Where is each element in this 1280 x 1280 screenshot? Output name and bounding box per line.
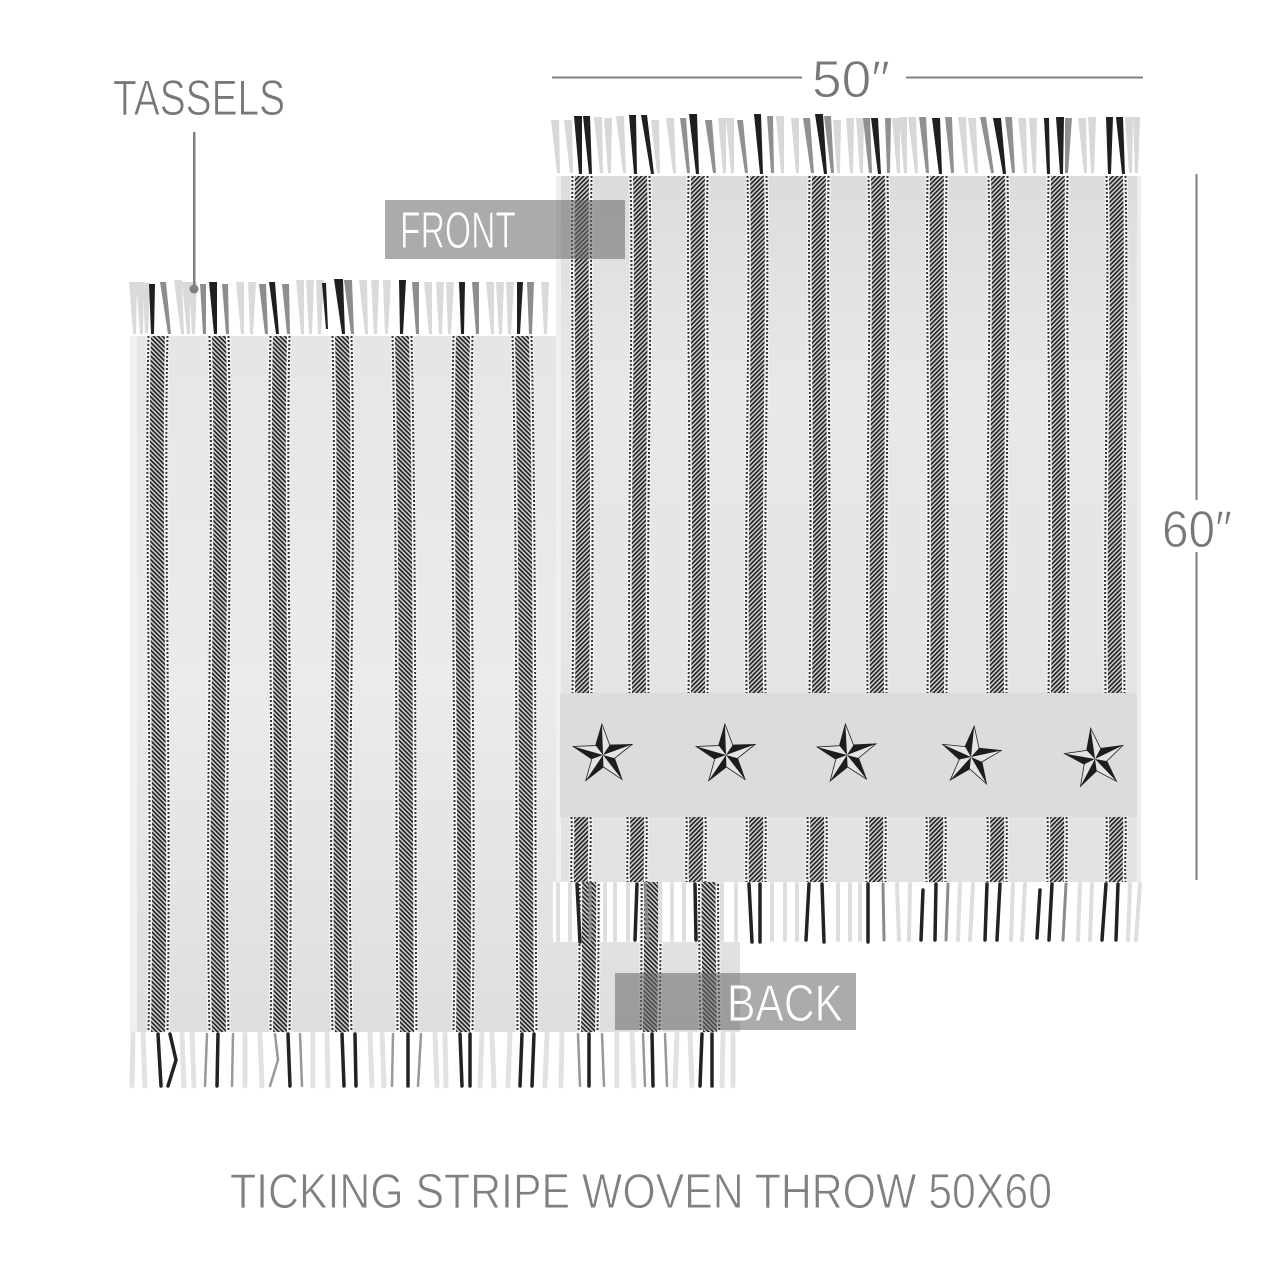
front top tassels — [551, 114, 1140, 174]
back stripes — [147, 336, 721, 1032]
tassels leader line with dot — [190, 132, 198, 294]
star band — [560, 693, 1137, 817]
front bottom tassels — [558, 884, 1140, 942]
front cloth — [556, 176, 1141, 882]
panel: front of throw — [551, 114, 1141, 942]
label: FRONT — [385, 200, 625, 260]
height line — [1196, 174, 1198, 880]
front folded left edge — [556, 176, 561, 882]
white gap behind front fringe — [553, 882, 740, 942]
width value: 50″ — [812, 51, 890, 109]
front upper stripes — [572, 176, 1126, 693]
back label box — [615, 973, 856, 1030]
label: BACK — [615, 973, 856, 1033]
title: TICKING STRIPE WOVEN THROW 50X60 — [230, 1165, 1052, 1219]
stars — [572, 722, 1128, 788]
width line — [552, 76, 1143, 78]
back top tassels — [129, 279, 549, 334]
height value: 60″ — [1162, 501, 1232, 559]
front folded right edge — [1137, 176, 1141, 882]
tassels label: TASSELS — [113, 70, 285, 126]
back cloth — [130, 336, 740, 1032]
back label text: BACK — [727, 975, 843, 1033]
front label text: FRONT — [400, 202, 516, 260]
back bottom tassels — [132, 1034, 733, 1086]
front label box — [385, 200, 625, 259]
front lower stripes — [571, 817, 1126, 882]
panel: back of throw — [129, 279, 740, 1086]
back folded left edge — [130, 336, 137, 1032]
callout: tassels — [113, 70, 285, 294]
